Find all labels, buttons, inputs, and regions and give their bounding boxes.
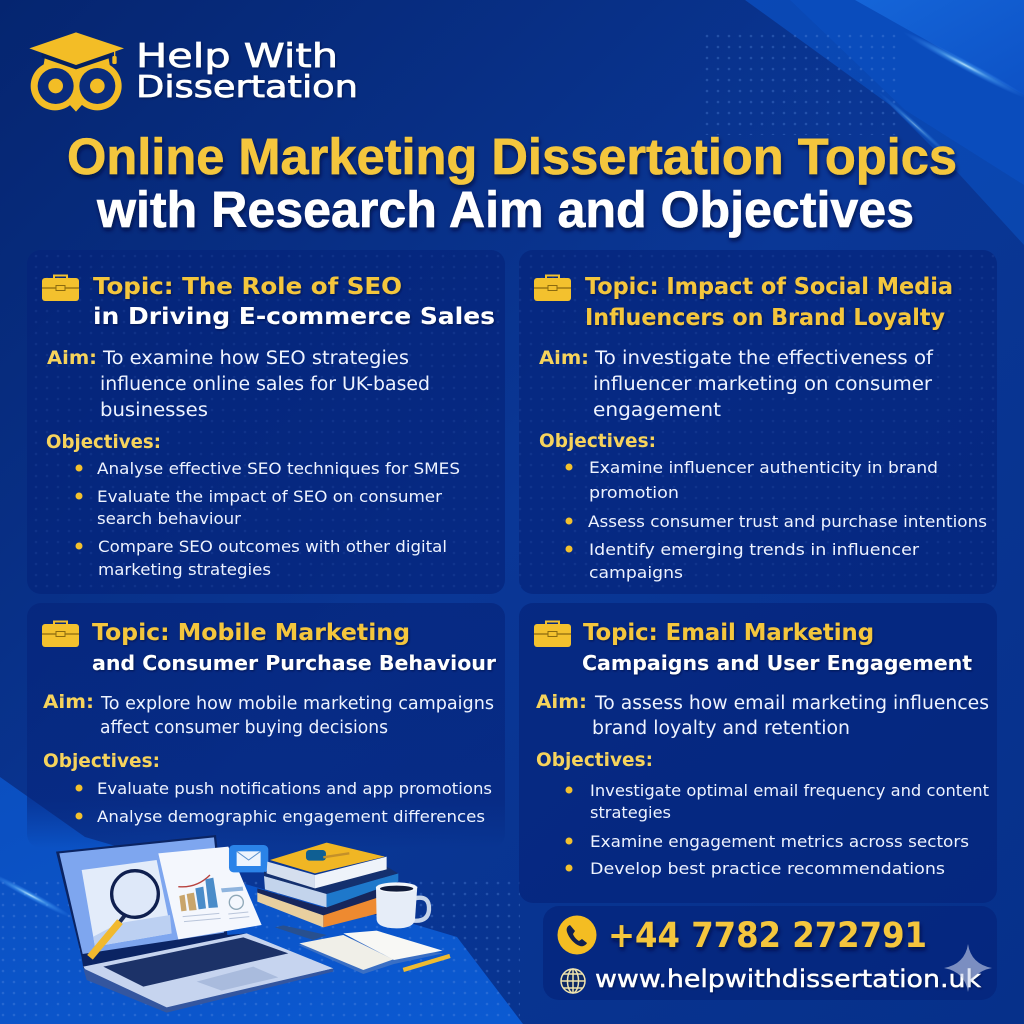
panel heading: Topic: Impact of Social Media bbox=[585, 274, 953, 300]
icon: briefcase bbox=[534, 276, 571, 301]
panel heading: Topic: Mobile Marketing bbox=[92, 620, 410, 646]
aim text: influencer marketing on consumer bbox=[593, 374, 932, 395]
logo wordmark: Help With bbox=[136, 36, 338, 75]
panel heading: Influencers on Brand Loyalty bbox=[585, 305, 945, 331]
icon: email badge bbox=[229, 845, 268, 872]
objectives list: Evaluate push notifications and app promotions bbox=[97, 779, 492, 798]
panel heading bbox=[582, 620, 972, 675]
stack of books bbox=[257, 843, 398, 927]
aim text: To examine how SEO strategies bbox=[102, 348, 409, 369]
aim text: affect consumer buying decisions bbox=[100, 718, 388, 738]
objectives list bbox=[536, 749, 989, 878]
logo wordmark bbox=[136, 36, 358, 105]
objectives list bbox=[43, 750, 492, 826]
objectives list: Compare SEO outcomes with other digital bbox=[98, 537, 447, 556]
logo wordmark: Dissertation bbox=[136, 70, 358, 105]
title bbox=[67, 128, 957, 238]
objectives list: Objectives: bbox=[539, 430, 656, 452]
aim text bbox=[539, 347, 934, 421]
contact panel bbox=[543, 906, 997, 1000]
website address: www.helpwithdissertation.uk bbox=[595, 965, 981, 993]
panel heading: Topic: The Role of SEO bbox=[93, 274, 402, 300]
objectives list: Evaluate the impact of SEO on consumer bbox=[97, 487, 442, 506]
panel: email marketing bbox=[519, 603, 997, 903]
aim text: To assess how email marketing influences bbox=[594, 693, 989, 714]
aim text: businesses bbox=[100, 400, 208, 421]
panel heading bbox=[585, 274, 953, 331]
report with bar chart bbox=[158, 847, 262, 939]
objectives list: Objectives: bbox=[43, 750, 160, 772]
panel heading bbox=[92, 620, 496, 675]
objectives list: promotion bbox=[589, 483, 679, 502]
icon: briefcase bbox=[534, 622, 571, 647]
objectives list: Assess consumer trust and purchase intentions bbox=[588, 512, 987, 531]
aim text bbox=[536, 691, 989, 739]
aim text: To explore how mobile marketing campaigns bbox=[100, 694, 494, 714]
objectives list: Analyse demographic engagement differences bbox=[97, 807, 485, 826]
laptop bbox=[56, 835, 333, 1013]
icon: coffee mug bbox=[376, 882, 429, 928]
aim text: Aim: bbox=[539, 347, 589, 369]
stylus bbox=[275, 925, 327, 940]
icon: globe bbox=[561, 969, 585, 993]
aim text: influence online sales for UK-based bbox=[100, 374, 430, 395]
objectives list: strategies bbox=[590, 803, 671, 822]
objectives list bbox=[46, 431, 460, 579]
aim text bbox=[47, 347, 430, 421]
icon: magnifying glass bbox=[90, 871, 158, 957]
panel: mobile marketing bbox=[27, 603, 505, 848]
title: with Research Aim and Objectives bbox=[96, 181, 914, 238]
aim text: Aim: bbox=[47, 347, 97, 369]
objectives list: Examine influencer authenticity in brand bbox=[589, 458, 938, 477]
illustration: laptop, report, books and coffee bbox=[56, 835, 450, 1013]
objectives list: Analyse effective SEO techniques for SMES bbox=[97, 459, 460, 478]
panel heading: Campaigns and User Engagement bbox=[582, 651, 972, 675]
objectives list: Objectives: bbox=[536, 749, 653, 771]
objectives list: Develop best practice recommendations bbox=[590, 859, 945, 878]
objectives list: Objectives: bbox=[46, 431, 161, 453]
title: Online Marketing Dissertation Topics bbox=[67, 128, 957, 185]
icon: sparkle watermark bbox=[944, 944, 992, 992]
open notebook bbox=[298, 931, 450, 974]
panel heading bbox=[93, 274, 495, 330]
aim text: To investigate the effectiveness of bbox=[594, 348, 934, 369]
panel: SEO and e-commerce sales bbox=[27, 250, 505, 594]
objectives list: Examine engagement metrics across sectors bbox=[590, 832, 969, 851]
objectives list: Identify emerging trends in influencer bbox=[589, 540, 919, 559]
panel: social media influencers bbox=[519, 250, 997, 594]
aim text: brand loyalty and retention bbox=[592, 718, 850, 739]
panel heading: and Consumer Purchase Behaviour bbox=[92, 651, 496, 675]
panel heading: Topic: Email Marketing bbox=[583, 620, 874, 646]
icon: owl with graduation cap bbox=[29, 32, 124, 112]
objectives list: marketing strategies bbox=[98, 560, 271, 579]
icon: briefcase bbox=[42, 276, 79, 301]
aim text: engagement bbox=[593, 400, 721, 421]
objectives list: search behaviour bbox=[97, 509, 241, 528]
objectives list: campaigns bbox=[589, 563, 683, 582]
aim text bbox=[43, 691, 494, 738]
panel heading: in Driving E-commerce Sales bbox=[93, 304, 495, 330]
logo: Help With Dissertation bbox=[29, 32, 358, 112]
objectives list: Investigate optimal email frequency and content bbox=[590, 781, 989, 800]
icon: phone bbox=[558, 916, 596, 954]
icon: briefcase bbox=[42, 622, 79, 647]
objectives list bbox=[539, 430, 987, 582]
phone number: +44 7782 272791 bbox=[608, 916, 927, 956]
aim text: Aim: bbox=[536, 691, 587, 713]
aim text: Aim: bbox=[43, 691, 94, 713]
